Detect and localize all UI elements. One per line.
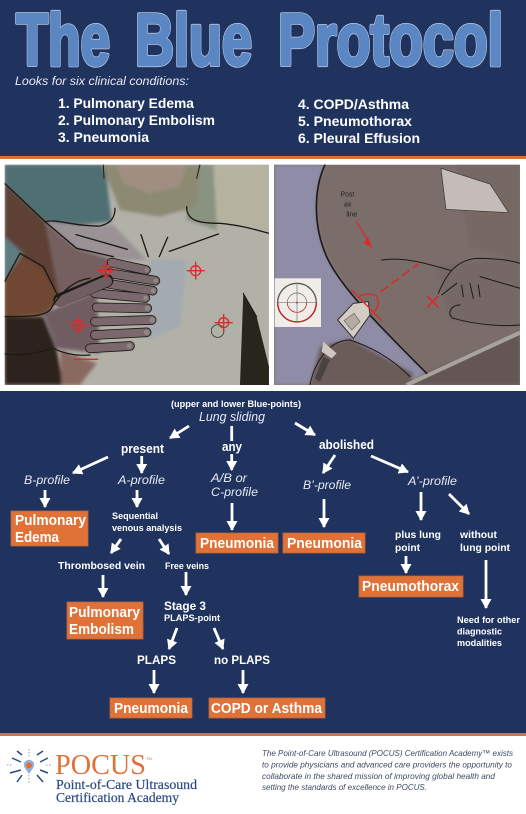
photo: posterior axillary line probe: line <box>346 212 357 219</box>
conditions list right: 4. COPD/Asthma <box>298 96 409 112</box>
conditions list left: 3. Pneumonia <box>58 129 149 145</box>
footer logo: Certification Academy <box>56 791 179 806</box>
conditions list left: 1. Pulmonary Edema <box>58 95 194 111</box>
secondary labels: without <box>459 529 497 541</box>
profile labels: B-profile <box>24 473 70 487</box>
title: The <box>16 0 110 81</box>
profile labels: A’-profile <box>407 474 457 488</box>
footer description text: The Point-of-Care Ultrasound (POCUS) Certification Academy™ exists <box>262 748 514 758</box>
fingers <box>60 263 158 349</box>
footer logo: Point-of-Care Ultrasound <box>56 778 197 793</box>
flowchart panel: Lung sliding <box>199 410 265 424</box>
secondary labels: diagnostic <box>457 626 502 638</box>
secondary labels: PLAPS <box>137 655 176 667</box>
photo: posterior axillary line probe: ax <box>344 202 352 209</box>
flowchart heading text: (upper and lower Blue-points) <box>171 399 301 409</box>
footer description text: setting the standards of excellence in POCUS. <box>262 782 427 792</box>
icon: ultrasound pin with rays <box>7 749 51 784</box>
flowchart panel <box>0 391 526 736</box>
footer logo: TM <box>146 756 152 761</box>
conditions list right: 6. Pleural Effusion <box>298 130 420 146</box>
header panel <box>0 0 526 159</box>
result: COPD or Asthma: COPD or Asthma <box>211 700 323 717</box>
conditions list left: 2. Pulmonary Embolism <box>58 112 215 128</box>
secondary labels: Sequential <box>112 511 158 521</box>
footer description text: to provide physicians and advanced care providers the opportunity to <box>262 760 512 770</box>
title: The <box>16 0 110 81</box>
branch labels: abolished <box>319 438 374 452</box>
result: Pneumonia (PLAPS): Pneumonia <box>114 700 189 717</box>
secondary labels <box>58 511 520 667</box>
photo: chest with Blue-points <box>5 165 269 385</box>
result: Pulmonary Embolism: Pulmonary <box>69 604 141 621</box>
secondary labels: point <box>395 542 420 554</box>
secondary labels: lung point <box>460 542 510 554</box>
profile labels: A/B or <box>210 471 248 485</box>
result: Pulmonary Edema: Pulmonary <box>15 512 87 529</box>
secondary labels: Free veins <box>165 561 209 571</box>
result: Pulmonary Edema <box>11 511 88 546</box>
title: Blue <box>135 0 252 81</box>
secondary labels: Need for other <box>457 615 520 626</box>
profile labels: C-profile <box>211 485 258 499</box>
profile labels <box>24 471 457 499</box>
branch labels: present <box>121 442 165 456</box>
secondary labels: plus lung <box>395 529 441 541</box>
result: Pulmonary Embolism <box>67 602 143 639</box>
footer description text: collaborate in the shared mission of improving global health and <box>262 771 495 781</box>
footer logo: POCUS <box>55 750 146 781</box>
result: Pneumothorax: Pneumothorax <box>362 578 460 595</box>
photo: posterior axillary line probe: Post <box>340 192 354 199</box>
conditions list right: 5. Pneumothorax <box>298 113 412 129</box>
title: Blue <box>135 0 252 81</box>
arrows <box>45 423 486 693</box>
branch labels <box>121 438 374 456</box>
conditions list left <box>58 95 215 145</box>
footer logo <box>7 749 197 806</box>
subtitle: Looks for six clinical conditions: <box>15 74 189 88</box>
profile labels: B’-profile <box>303 478 351 492</box>
result: Pulmonary Edema: Edema <box>15 529 60 546</box>
secondary labels: no PLAPS <box>214 655 270 667</box>
result: Pneumonia (B'-profile): Pneumonia <box>287 535 363 552</box>
secondary labels: modalities <box>457 638 502 649</box>
result: Pulmonary Embolism: Embolism <box>69 621 134 638</box>
secondary labels: venous analysis <box>112 523 182 533</box>
conditions list right <box>298 96 420 146</box>
secondary labels: Stage 3 <box>164 599 206 613</box>
title <box>16 0 503 81</box>
secondary labels: PLAPS-point <box>164 613 220 623</box>
profile labels: A-profile <box>117 473 165 487</box>
photo: posterior axillary line probe <box>274 165 520 385</box>
secondary labels: Thrombosed vein <box>58 560 145 572</box>
result: Pneumonia (A/B or C-profile): Pneumonia <box>200 535 275 552</box>
footer description text <box>262 748 514 792</box>
branch labels: any <box>222 440 242 454</box>
